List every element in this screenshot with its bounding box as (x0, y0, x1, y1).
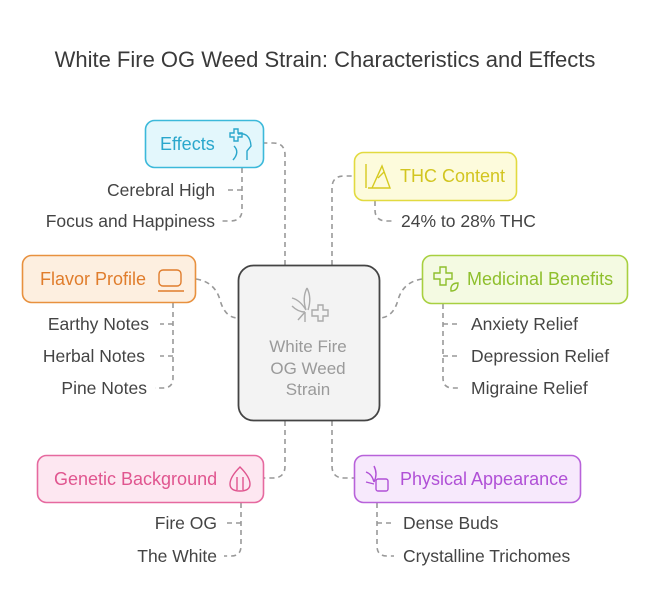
node: center: OG Weed (270, 359, 346, 378)
node: genetic background (38, 456, 264, 502)
THC item: 24% to 28% THC (401, 211, 536, 231)
medicinal items (471, 314, 609, 398)
title: White Fire OG Weed Strain: Characteristics and Effects (55, 47, 595, 72)
icon: seed (230, 467, 250, 491)
genetic items: The White (137, 546, 217, 566)
node: medicinal benefits (422, 256, 628, 304)
node: THC content (354, 152, 516, 200)
medicinal items: Depression Relief (471, 346, 609, 366)
icon: leaf with box (366, 466, 388, 491)
physical items: Dense Buds (403, 513, 499, 533)
medicinal items: Migraine Relief (471, 378, 588, 398)
effects items (46, 180, 215, 231)
flavor items (43, 314, 149, 398)
node: flavor profile: Flavor Profile (40, 269, 146, 289)
icon: cannabis leaf with cross (292, 288, 328, 322)
physical items: Crystalline Trichomes (403, 546, 571, 566)
node: center (238, 266, 380, 420)
genetic items (137, 513, 217, 566)
node: physical appearance (354, 456, 580, 502)
icon: cross with leaf (434, 267, 458, 291)
flavor items: Pine Notes (61, 378, 147, 398)
flavor items: Earthy Notes (48, 314, 149, 334)
effects items: Focus and Happiness (46, 211, 215, 231)
node: physical appearance: Physical Appearance (400, 469, 568, 489)
icon: head with cross (230, 129, 251, 160)
node: flavor profile (22, 256, 196, 302)
node: genetic background: Genetic Background (54, 469, 217, 489)
flavor items: Herbal Notes (43, 346, 145, 366)
node: medicinal benefits: Medicinal Benefits (467, 269, 613, 289)
connectors (155, 143, 461, 556)
node: center: White Fire (269, 337, 347, 356)
icon: cup (158, 270, 184, 291)
node: effects (146, 120, 264, 168)
effects items: Cerebral High (107, 180, 215, 200)
genetic items: Fire OG (155, 513, 217, 533)
node: center: Strain (286, 380, 330, 399)
medicinal items: Anxiety Relief (471, 314, 578, 334)
icon: mountain (366, 164, 390, 188)
node: effects: Effects (160, 134, 215, 154)
node: THC content: THC Content (400, 166, 505, 186)
physical items (403, 513, 571, 566)
